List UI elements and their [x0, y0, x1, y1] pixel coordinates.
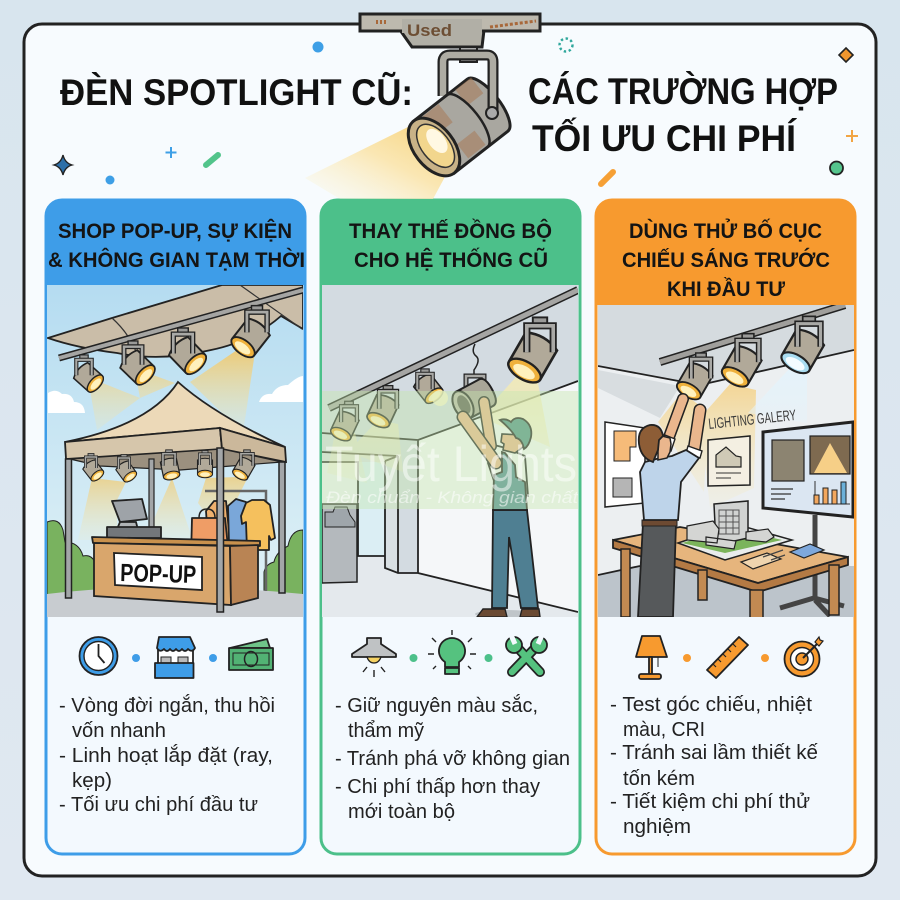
icon: crossed wrenches — [506, 635, 547, 672]
illustration: lighting gallery test — [598, 305, 854, 620]
panel 2 header background — [321, 200, 580, 285]
track spotlights — [674, 316, 826, 403]
icon: clock — [80, 637, 118, 675]
icon: banknotes — [229, 639, 273, 670]
bullet dot — [209, 654, 217, 662]
panel 1 header background — [46, 200, 305, 285]
yoke front arm and pivot — [486, 65, 498, 119]
illustration: technician replacing lamps — [322, 285, 579, 618]
panel: replacement — [321, 200, 580, 854]
lamp body — [398, 72, 517, 185]
light beam — [305, 125, 447, 199]
panel 3 bullet list: tốn kém — [623, 768, 695, 790]
icon: ruler — [707, 637, 748, 678]
watermark: Đèn chuẩn - Không gian chất — [326, 488, 579, 507]
tent spotlights — [82, 450, 256, 484]
bullet dot — [132, 654, 140, 662]
panel 1 bullet list: - Tối ưu chi phí đầu tư — [59, 794, 258, 816]
panel 1 bullet list — [59, 694, 275, 816]
watermark — [322, 391, 579, 509]
yoke bracket — [443, 47, 493, 100]
panel 1 bullet list: kẹp) — [72, 770, 112, 792]
illustration: pop-up tent — [47, 285, 303, 617]
title: CÁC TRƯỜNG HỢP — [528, 70, 838, 112]
decorative confetti icons — [54, 38, 858, 184]
panel 1 bullet list: vốn nhanh — [72, 720, 166, 742]
bullet dot — [683, 654, 691, 662]
panel 3 heading: CHIẾU SÁNG TRƯỚC — [622, 248, 830, 272]
panel: pop-up — [46, 200, 305, 854]
track rail — [360, 14, 540, 47]
panel 3 header background — [596, 200, 855, 305]
title: TỐI ƯU CHI PHÍ — [532, 117, 798, 159]
panel 3 bullet list: màu, CRI — [623, 719, 705, 741]
panel 2 heading: CHO HỆ THỐNG CŨ — [354, 248, 548, 272]
watermark: Tuyết Lights — [325, 436, 577, 492]
track spotlights — [329, 317, 559, 444]
bullet dot — [484, 654, 492, 662]
panel 1 heading: & KHÔNG GIAN TẠM THỜI — [48, 248, 305, 272]
panel 2 bullet list: - Tránh phá vỡ không gian — [335, 748, 570, 770]
panel 3 bullet list: - Test góc chiếu, nhiệt — [610, 694, 812, 716]
panel 2 heading — [349, 219, 552, 272]
panel 1 icon row — [80, 637, 273, 678]
man testing lamp — [638, 399, 702, 617]
panel 2 bullet list — [335, 694, 570, 823]
panel 2 heading: THAY THẾ ĐỒNG BỘ — [349, 219, 552, 243]
panel 2 bullet list: - Chi phí thấp hơn thay — [335, 776, 540, 798]
title: ĐÈN SPOTLIGHT CŨ: — [60, 71, 413, 113]
illustration: lighting gallery test: LIGHTING GALERY — [708, 407, 797, 433]
illustration: pop-up tent: POP-UP — [120, 559, 197, 589]
panel 2 icon row — [352, 630, 547, 677]
track rail: Used — [407, 21, 452, 40]
technician — [463, 402, 540, 618]
icon: light bulb — [428, 630, 476, 674]
panel 3 heading — [622, 219, 830, 301]
panel 3 bullet list — [610, 694, 818, 838]
panel 1 bullet list: - Vòng đời ngắn, thu hồi — [59, 694, 275, 717]
panel 3 icon row — [636, 636, 823, 679]
bullet dot — [410, 654, 418, 662]
panel 3 bullet list: - Tiết kiệm chi phí thử — [610, 791, 810, 813]
panel 1 bullet list: - Linh hoạt lắp đặt (ray, — [59, 744, 273, 767]
hero used spotlight on track — [305, 14, 540, 199]
panel 2 bullet list: mới toàn bộ — [348, 801, 455, 823]
bullet dot — [761, 654, 769, 662]
icon: ceiling hood lamp — [352, 638, 396, 677]
icon: shop stall — [155, 637, 195, 678]
held lamp with wire — [451, 344, 497, 418]
panel 3 bullet list: - Tránh sai lầm thiết kế — [610, 742, 818, 764]
icon: target — [784, 637, 823, 676]
icon: table lamp — [636, 636, 667, 679]
panel 1 heading: SHOP POP-UP, SỰ KIỆN — [58, 219, 292, 243]
panel: trial layout — [596, 200, 855, 854]
panel 2 bullet list: - Giữ nguyên màu sắc, — [335, 694, 538, 717]
panel 1 heading — [48, 219, 305, 272]
title — [60, 70, 838, 159]
panel 2 bullet list: thẩm mỹ — [348, 720, 424, 742]
upper track spotlights — [72, 306, 272, 395]
panel 3 heading: KHI ĐẦU TƯ — [667, 278, 786, 301]
panel 3 bullet list: nghiệm — [623, 816, 691, 838]
panel 3 heading: DÙNG THỬ BỐ CỤC — [629, 219, 822, 243]
